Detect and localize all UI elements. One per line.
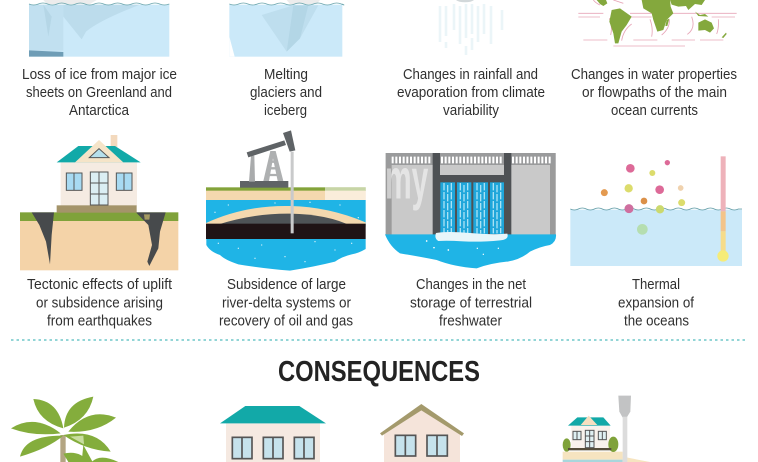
text: tectonic caption: from earthquakes bbox=[47, 314, 152, 330]
text: ice sheet caption: Loss of ice from major ice bbox=[22, 67, 177, 83]
panel: melting glaciers bbox=[229, 0, 344, 119]
icon: house on cracked ground bbox=[20, 135, 178, 270]
text: currents caption bbox=[571, 67, 737, 119]
text: glaciers caption: iceberg bbox=[264, 103, 307, 119]
panel: ocean currents bbox=[571, 0, 737, 119]
text: glaciers caption: Melting bbox=[264, 67, 308, 83]
text: rainfall caption: evaporation from climate bbox=[397, 85, 545, 101]
text: tectonic caption: or subsidence arising bbox=[36, 296, 163, 312]
icon: oil pump and reservoir bbox=[206, 130, 366, 271]
icon: house with water pipe bbox=[563, 396, 650, 462]
panel: tectonic effects bbox=[20, 135, 178, 330]
icon: rain streaks bbox=[440, 0, 502, 55]
panel: terrestrial storage bbox=[385, 148, 556, 330]
icon: ice sheet under water bbox=[29, 0, 169, 57]
text: rainfall caption: Changes in rainfall and bbox=[403, 67, 538, 83]
text: subsidence caption: Subsidence of large bbox=[227, 277, 346, 293]
text: storage caption bbox=[410, 277, 532, 330]
text: tectonic caption bbox=[27, 277, 172, 330]
text: currents caption: Changes in water properties bbox=[571, 67, 737, 83]
text: storage caption: Changes in the net bbox=[416, 277, 526, 293]
text: subsidence caption bbox=[219, 277, 353, 330]
text: storage caption: freshwater bbox=[439, 314, 502, 330]
text: rainfall caption: variability bbox=[443, 103, 500, 119]
text: glaciers caption bbox=[250, 67, 322, 119]
panel: thermal expansion bbox=[570, 156, 742, 330]
text: subsidence caption: river-delta systems or bbox=[222, 296, 351, 312]
text: glaciers caption: glaciers and bbox=[250, 85, 322, 101]
icon: dam with spillways: my bbox=[385, 148, 429, 211]
text: thermal caption bbox=[618, 277, 695, 330]
icon: gable house bbox=[380, 404, 464, 462]
panel: rainfall bbox=[397, 0, 545, 119]
text: ice sheet caption bbox=[22, 67, 177, 119]
text: ice sheet caption: Antarctica bbox=[69, 103, 130, 119]
panel: subsidence and oil bbox=[206, 130, 366, 330]
icon: palm trees bbox=[11, 397, 118, 462]
icon: flat-roof house bbox=[220, 406, 326, 462]
text: subsidence caption: recovery of oil and gas bbox=[219, 314, 353, 330]
text: thermal caption: Thermal bbox=[632, 277, 680, 293]
text: storage caption: storage of terrestrial bbox=[410, 296, 532, 312]
text: thermal caption: expansion of bbox=[618, 296, 695, 312]
icon: ocean, particles and thermometer bbox=[570, 156, 742, 266]
icon: iceberg under water bbox=[229, 0, 344, 57]
panel: ice sheet loss bbox=[22, 0, 177, 119]
icon: dam with spillways bbox=[385, 148, 556, 268]
heading: consequences: CONSEQUENCES bbox=[278, 356, 480, 388]
text: tectonic caption: Tectonic effects of uplift bbox=[27, 277, 172, 293]
text: currents caption: or flowpaths of the main bbox=[582, 85, 727, 101]
icon: world map with currents bbox=[578, 0, 737, 46]
text: currents caption: ocean currents bbox=[611, 103, 698, 119]
text: rainfall caption bbox=[397, 67, 545, 119]
text: ice sheet caption: sheets on Greenland and bbox=[26, 85, 172, 101]
text: thermal caption: the oceans bbox=[624, 314, 689, 330]
